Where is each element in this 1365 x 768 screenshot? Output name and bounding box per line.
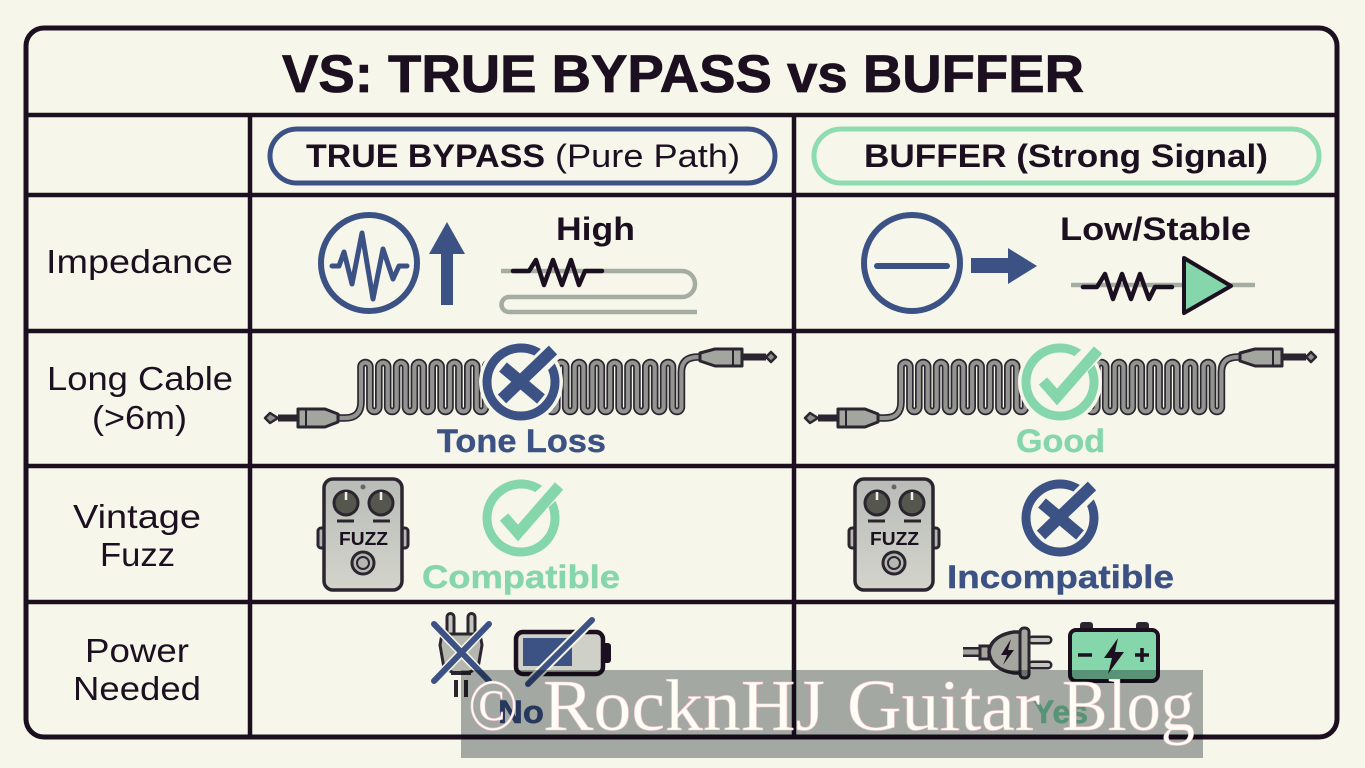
watermark: © — [468, 665, 518, 746]
watermark: Blog — [1062, 665, 1195, 746]
icon: right arrow — [971, 248, 1037, 284]
icon: up arrow — [429, 222, 465, 305]
label: compatible: Compatible — [422, 559, 620, 595]
watermark: Guitar — [847, 665, 1040, 746]
label: incompatible: Incompatible — [947, 559, 1174, 595]
icon: crossed out battery — [516, 620, 611, 684]
row label: long cable: Long Cable — [47, 360, 233, 397]
icon: waveform circle — [321, 215, 417, 311]
row label: power needed: Needed — [73, 670, 201, 707]
label: good: Good — [1016, 423, 1105, 459]
row label: power needed: Power — [85, 632, 189, 669]
icon: check badge, compatible — [487, 482, 561, 552]
icon: fuzz pedal, true bypass: FUZZ — [339, 529, 388, 549]
row label: power needed — [73, 632, 201, 707]
label: low stable: Low/Stable — [1060, 211, 1251, 247]
label: yes: Yes — [1033, 694, 1088, 730]
row label: long cable — [47, 360, 233, 436]
label: high: High — [556, 211, 635, 247]
row label: long cable: (>6m) — [92, 399, 187, 436]
icon: resistor and buffer amp — [1071, 258, 1255, 313]
row label: vintage fuzz — [73, 498, 201, 573]
header: true bypass: (Pure Path) — [555, 138, 740, 174]
icon: fuzz pedal, buffer — [849, 479, 939, 590]
watermark: RocknHJ — [543, 665, 825, 746]
icon: coiled cable, true bypass — [262, 349, 776, 427]
icon: charged battery — [1070, 622, 1158, 681]
icon: cross badge, tone loss — [479, 340, 563, 424]
header: true bypass: TRUE BYPASS — [306, 138, 545, 174]
icon: check badge, good — [1018, 340, 1102, 424]
icon: crossed out plug — [434, 614, 489, 697]
label: tone loss: Tone Loss — [437, 423, 606, 459]
row label: vintage fuzz: Vintage — [73, 498, 201, 535]
icon: power plug — [963, 628, 1048, 678]
header: true bypass — [270, 129, 775, 183]
icon: cross badge, incompatible — [1026, 483, 1096, 552]
title: VS: TRUE BYPASS vs BUFFER — [282, 45, 1084, 104]
row label: impedance: Impedance — [46, 243, 233, 280]
watermark — [461, 665, 1203, 758]
icon: fuzz pedal, true bypass — [318, 479, 408, 590]
icon: high impedance resistor and cable — [501, 260, 697, 312]
label: no: No — [498, 694, 544, 730]
icon: flat signal circle — [864, 215, 960, 311]
header: buffer: BUFFER (Strong Signal) — [864, 138, 1268, 174]
icon: coiled cable, buffer — [802, 349, 1316, 427]
icon: fuzz pedal, buffer: FUZZ — [870, 529, 919, 549]
header: buffer — [814, 129, 1319, 183]
row label: vintage fuzz: Fuzz — [100, 536, 175, 573]
